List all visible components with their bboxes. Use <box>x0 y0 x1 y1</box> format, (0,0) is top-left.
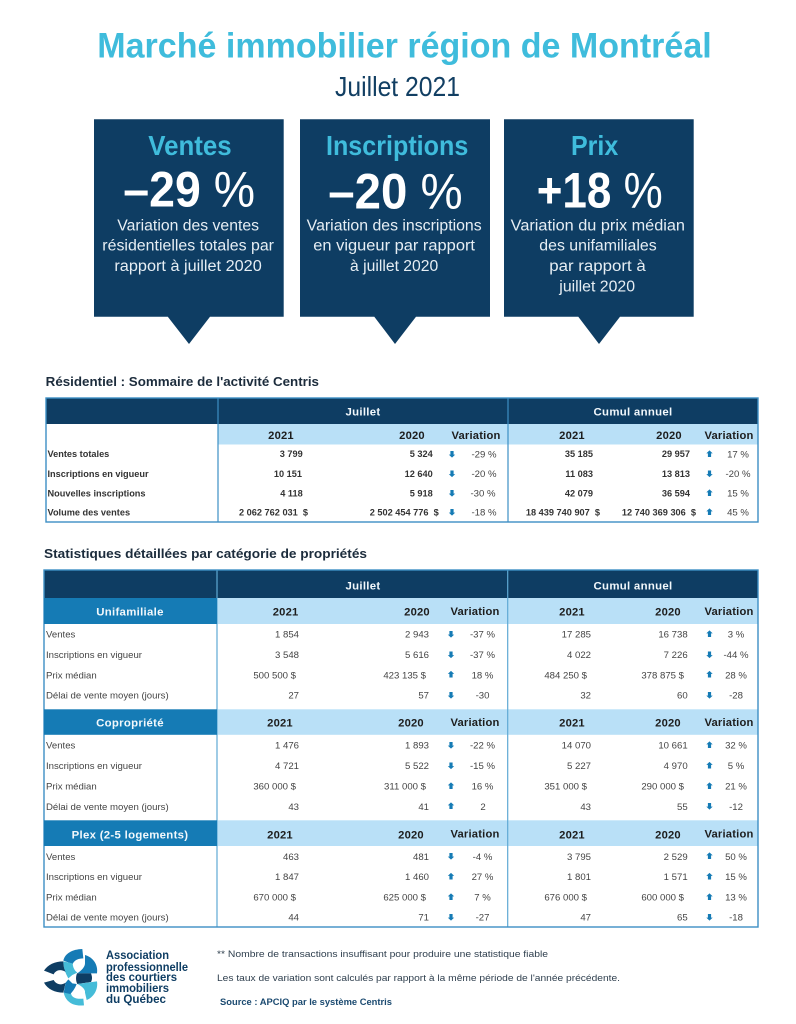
row: copropriété inscriptions: -15 % <box>470 761 496 772</box>
row: unifamiliale délai: 60 <box>677 690 688 701</box>
row: unifamiliale ventes: 1 854 <box>275 630 300 641</box>
row: copropriété prix: 290 000 $ <box>641 781 685 792</box>
description: prix: des unifamiliales <box>539 238 657 255</box>
row: unifamiliale délai: 32 <box>580 690 591 701</box>
logo text: Association <box>106 950 169 962</box>
table: sommaire de l'activité Centris <box>46 398 758 522</box>
row: ventes totales: -29 % <box>471 450 497 460</box>
figure: ventes: –29 % <box>123 162 255 218</box>
row: plex prix: Prix médian <box>46 892 97 903</box>
row: unifamiliale prix: Prix médian <box>46 670 97 681</box>
row: ventes totales: 3 799 <box>280 449 303 459</box>
table header: Variation <box>704 430 754 442</box>
figure: prix: +18 % <box>537 162 663 218</box>
description: inscriptions <box>307 218 482 275</box>
row: copropriété délai: Délai de vente moyen (jours) <box>46 802 169 813</box>
row: ventes totales: 17 % <box>727 450 749 460</box>
table header: 2021 <box>559 430 585 442</box>
row: unifamiliale délai: 27 <box>288 690 299 701</box>
row: unifamiliale inscriptions: 3 548 <box>275 650 299 661</box>
band: plex: 2021 <box>267 829 293 841</box>
row: unifamiliale ventes: 2 943 <box>405 630 429 641</box>
row: plex inscriptions: 27 % <box>472 872 494 883</box>
row: plex prix: 7 % <box>474 892 491 903</box>
footnote: variation: Les taux de variation sont calculés par rapport à la même période de l'année précédente. <box>217 972 620 983</box>
row: copropriété inscriptions: 5 227 <box>567 761 591 772</box>
description: ventes: rapport à juillet 2020 <box>114 258 262 275</box>
row: plex ventes: 3 795 <box>567 852 591 863</box>
row: plex inscriptions: 1 460 <box>405 872 429 883</box>
row: unifamiliale inscriptions: 5 616 <box>405 650 429 661</box>
row: ventes totales: 29 957 <box>662 449 690 459</box>
row: copropriété ventes: 32 % <box>725 741 747 752</box>
row: volume des ventes <box>48 508 749 518</box>
row: copropriété inscriptions: 4 970 <box>664 761 688 772</box>
description: prix: juillet 2020 <box>558 279 635 296</box>
band: unifamiliale: Variation <box>450 606 500 618</box>
row: ventes totales: Ventes totales <box>48 449 109 459</box>
band: plex: Variation <box>704 828 754 840</box>
row: nouvelles inscriptions: -30 % <box>470 488 496 500</box>
row: plex ventes: 50 % <box>725 852 747 863</box>
row: copropriété prix: 16 % <box>472 781 494 792</box>
row: copropriété inscriptions: 5 522 <box>405 761 429 772</box>
row: ventes totales: 5 324 <box>410 449 434 459</box>
icon: APCIQ logo <box>44 949 97 1006</box>
band: copropriété: 2021 <box>267 718 293 730</box>
row: copropriété inscriptions: Inscriptions en vigueur <box>46 761 143 772</box>
band: unifamiliale: Variation <box>704 606 754 618</box>
row: copropriété délai: 43 <box>288 802 299 813</box>
logo text: professionnelle <box>106 962 188 974</box>
table header <box>345 580 672 592</box>
row: copropriété délai: -12 <box>729 802 743 813</box>
row: copropriété délai <box>46 802 743 813</box>
row: unifamiliale ventes: 3 % <box>728 630 745 641</box>
row: plex inscriptions: 1 847 <box>275 872 299 883</box>
row: plex ventes: 463 <box>283 852 299 863</box>
heading: statistiques détaillées: Statistiques détaillées par catégorie de propriétés <box>44 546 367 561</box>
source: Source : APCIQ par le système Centris <box>220 996 392 1007</box>
row: unifamiliale ventes <box>46 630 745 641</box>
row: nouvelles inscriptions: 36 594 <box>662 488 691 498</box>
row: copropriété ventes: 14 070 <box>562 741 591 752</box>
row: copropriété prix: 21 % <box>725 781 747 792</box>
row: unifamiliale inscriptions: 7 226 <box>664 650 688 661</box>
heading: ventes: Ventes <box>148 130 232 161</box>
row: nouvelles inscriptions: 4 118 <box>280 488 303 498</box>
row: unifamiliale délai: Délai de vente moyen (jours) <box>46 690 169 701</box>
table header: Cumul annuel <box>594 580 672 592</box>
row: plex délai <box>46 913 743 924</box>
panel: ventes <box>94 119 284 344</box>
table header: 2020 <box>399 430 425 442</box>
description: ventes <box>102 218 274 275</box>
band: unifamiliale: 2020 <box>404 607 430 619</box>
row: plex inscriptions: Inscriptions en vigueur <box>46 872 143 883</box>
panel: inscriptions <box>300 119 490 344</box>
band: unifamiliale: 2020 <box>655 607 681 619</box>
logo text: immobiliers <box>106 983 169 995</box>
row: unifamiliale délai: -28 <box>729 690 743 701</box>
row: unifamiliale délai: 57 <box>418 690 429 701</box>
band: unifamiliale: Unifamiliale <box>96 607 164 619</box>
band: plex: 2021 <box>559 829 585 841</box>
row: plex inscriptions: 1 801 <box>567 872 591 883</box>
row: plex délai: 71 <box>418 913 429 924</box>
row: copropriété ventes: Ventes <box>46 741 76 752</box>
heading: inscriptions: Inscriptions <box>326 130 468 161</box>
band: copropriété: Copropriété <box>96 718 164 730</box>
row: plex inscriptions: 1 571 <box>664 872 688 883</box>
band: copropriété: 2021 <box>559 718 585 730</box>
band: unifamiliale <box>44 598 754 624</box>
row: copropriété ventes: 1 476 <box>275 741 299 752</box>
row: inscriptions en vigueur <box>48 469 751 480</box>
row: plex ventes: Ventes <box>46 852 76 863</box>
row: plex délai: 65 <box>677 913 688 924</box>
row: nouvelles inscriptions: 15 % <box>727 488 749 500</box>
row: copropriété prix <box>46 781 747 792</box>
band: plex: 2020 <box>398 829 424 841</box>
row: unifamiliale inscriptions: 4 022 <box>567 650 591 661</box>
description: inscriptions: Variation des inscriptions <box>307 218 482 235</box>
row: inscriptions en vigueur: 10 151 <box>274 469 302 479</box>
description: inscriptions: en vigueur par rapport <box>313 238 476 255</box>
row: copropriété délai: 41 <box>418 802 429 813</box>
row: plex délai: -18 <box>729 913 743 924</box>
description: prix <box>511 218 685 296</box>
row: plex prix: 625 000 $ <box>383 892 427 903</box>
band: unifamiliale: 2021 <box>559 607 585 619</box>
row: unifamiliale inscriptions <box>46 650 749 661</box>
row: copropriété prix: 360 000 $ <box>253 781 297 792</box>
description: inscriptions: à juillet 2020 <box>350 258 439 275</box>
table header: Cumul annuel <box>594 407 672 419</box>
row: unifamiliale ventes: 17 285 <box>562 630 591 641</box>
row: nouvelles inscriptions: 5 918 <box>410 488 433 498</box>
row: inscriptions en vigueur: 11 083 <box>565 469 593 479</box>
table header: Variation <box>451 430 501 442</box>
row: inscriptions en vigueur: Inscriptions en vigueur <box>48 469 149 479</box>
row: plex prix: 676 000 $ <box>544 892 588 903</box>
table header: Juillet <box>345 580 381 592</box>
row: copropriété délai: 43 <box>580 802 591 813</box>
row: unifamiliale prix: 423 135 $ <box>383 670 427 681</box>
band: copropriété <box>44 709 754 735</box>
band: copropriété: 2020 <box>655 718 681 730</box>
table header: 2021 <box>268 430 294 442</box>
band: copropriété: Variation <box>450 717 500 729</box>
row: volume des ventes: -18 % <box>471 508 497 518</box>
footnote: transactions: ** Nombre de transactions insuffisant pour produire une statistique fiable <box>217 948 548 959</box>
table: statistiques détaillées <box>44 570 758 927</box>
row: plex ventes: 481 <box>413 852 429 863</box>
logo text: du Québec <box>106 994 167 1006</box>
heading: sommaire: Résidentiel : Sommaire de l'activité Centris <box>46 374 319 389</box>
row: copropriété inscriptions <box>46 761 745 772</box>
logo text: des courtiers <box>106 972 177 984</box>
row: volume des ventes: 2 062 762 031 $ <box>239 508 308 518</box>
row: unifamiliale prix: 378 875 $ <box>641 670 685 681</box>
row: unifamiliale prix: 484 250 $ <box>544 670 588 681</box>
row: unifamiliale ventes: -37 % <box>470 630 496 641</box>
row: unifamiliale inscriptions: -37 % <box>470 650 496 661</box>
subtitle: Juillet 2021 <box>335 71 460 102</box>
table header <box>268 407 754 442</box>
row: plex ventes <box>46 852 747 863</box>
panel: prix <box>504 119 694 344</box>
row: inscriptions en vigueur: -20 % <box>725 469 751 480</box>
description: prix: Variation du prix médian <box>511 218 685 235</box>
row: inscriptions en vigueur: 12 640 <box>405 469 433 479</box>
description: prix: par rapport à <box>549 258 646 275</box>
row: copropriété ventes <box>46 741 747 752</box>
row: volume des ventes: 18 439 740 907 $ <box>526 508 600 518</box>
row: volume des ventes: Volume des ventes <box>48 508 130 518</box>
title: Marché immobilier région de Montréal <box>97 27 712 66</box>
row: copropriété prix: 351 000 $ <box>544 781 588 792</box>
row: plex délai: -27 <box>476 913 489 924</box>
band: copropriété: 2020 <box>398 718 424 730</box>
row: volume des ventes: 45 % <box>727 508 749 518</box>
row: nouvelles inscriptions: Nouvelles inscriptions <box>48 488 146 498</box>
row: copropriété ventes: 10 661 <box>658 741 688 752</box>
table header: Juillet <box>345 407 381 419</box>
row: copropriété inscriptions: 4 721 <box>275 761 299 772</box>
description: ventes: Variation des ventes <box>117 218 259 235</box>
band: plex <box>44 820 754 846</box>
row: unifamiliale ventes: Ventes <box>46 630 76 641</box>
row: plex ventes: 2 529 <box>664 852 688 863</box>
band: unifamiliale: 2021 <box>273 607 298 619</box>
description: ventes: résidentielles totales par <box>102 238 274 255</box>
row: plex délai: 44 <box>288 913 300 924</box>
table header: 2020 <box>656 430 682 442</box>
row: plex inscriptions <box>46 872 747 883</box>
heading: prix: Prix <box>571 130 619 161</box>
row: unifamiliale délai <box>46 690 743 701</box>
row: plex prix: 13 % <box>725 892 747 903</box>
row: plex ventes: -4 % <box>473 852 493 863</box>
band: plex: 2020 <box>655 829 681 841</box>
row: unifamiliale prix: 28 % <box>725 670 747 681</box>
row: unifamiliale ventes: 16 738 <box>658 630 688 641</box>
row: copropriété ventes: 1 893 <box>405 741 429 752</box>
row: plex délai: 47 <box>580 913 591 924</box>
row: plex prix: 600 000 $ <box>641 892 685 903</box>
band: copropriété: Variation <box>704 717 754 729</box>
row: unifamiliale prix: 500 500 $ <box>253 670 297 681</box>
row: volume des ventes: 12 740 369 306 $ <box>622 508 696 518</box>
row: unifamiliale prix <box>46 670 747 681</box>
row: ventes totales: 35 185 <box>565 449 593 459</box>
band: plex: Plex (2-5 logements) <box>72 829 188 841</box>
row: inscriptions en vigueur: 13 813 <box>662 469 690 479</box>
row: nouvelles inscriptions <box>48 488 749 500</box>
row: copropriété prix: Prix médian <box>46 781 97 792</box>
row: ventes totales <box>48 449 749 460</box>
row: unifamiliale inscriptions: Inscriptions en vigueur <box>46 650 143 661</box>
row: plex inscriptions: 15 % <box>725 872 747 883</box>
row: plex délai: Délai de vente moyen (jours) <box>46 913 169 924</box>
row: unifamiliale prix: 18 % <box>472 670 494 681</box>
figure: inscriptions: –20 % <box>328 163 463 219</box>
logo text <box>106 950 188 1006</box>
row: nouvelles inscriptions: 42 079 <box>565 488 593 498</box>
row: copropriété délai: 55 <box>677 802 688 813</box>
row: unifamiliale inscriptions: -44 % <box>723 650 749 661</box>
row: copropriété prix: 311 000 $ <box>384 781 427 792</box>
row: inscriptions en vigueur: -20 % <box>471 469 497 480</box>
row: copropriété ventes: -22 % <box>470 741 496 752</box>
row: plex prix: 670 000 $ <box>253 892 297 903</box>
row: copropriété inscriptions: 5 % <box>728 761 745 772</box>
row: copropriété délai: 2 <box>480 802 486 813</box>
row: unifamiliale délai: -30 <box>476 690 489 701</box>
row: plex prix <box>46 892 747 903</box>
row: volume des ventes: 2 502 454 776 $ <box>370 508 439 518</box>
band: plex: Variation <box>450 828 500 840</box>
